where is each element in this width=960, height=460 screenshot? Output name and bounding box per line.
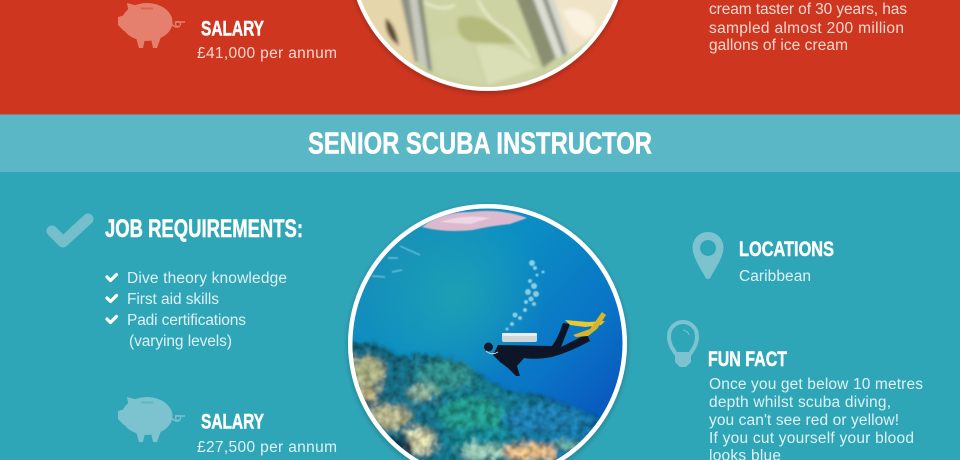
- icon: piggy bank, red section: [118, 3, 185, 48]
- photo: ice cream tubs: [345, 0, 630, 95]
- text: location value: Caribbean: [739, 268, 811, 285]
- text: salary amount, teal section: £27,500 per annum: [197, 439, 337, 456]
- bubbles: [506, 260, 544, 330]
- text: fun fact: [709, 376, 923, 460]
- text: fun fact: depth whilst scuba diving,: [709, 394, 891, 411]
- title: SENIOR SCUBA INSTRUCTOR: [308, 126, 652, 160]
- text: fun fact: If you cut yourself your blood: [709, 430, 914, 447]
- text: salary amount, red section: £41,000 per annum: [197, 45, 337, 62]
- text: fun fact: Once you get below 10 metres: [709, 376, 923, 393]
- text: fun fact, red section: gallons of ice cream: [709, 37, 848, 54]
- reef: [345, 344, 610, 460]
- list: job requirements: (varying levels): [129, 333, 232, 350]
- panel: red ice cream taster section: [0, 0, 960, 114]
- heading: fun fact: FUN FACT: [708, 347, 787, 371]
- list: job requirements: [107, 270, 287, 350]
- banner: title background: [0, 114, 960, 172]
- icon: piggy bank, teal section: [118, 397, 185, 442]
- text: fun fact, red section: cream taster of 30 years, has: [709, 1, 907, 18]
- text: fun fact, red section: sampled almost 200 million: [709, 20, 904, 37]
- list: job requirements: Dive theory knowledge: [127, 270, 287, 287]
- icon: map pin: [692, 232, 724, 279]
- heading: locations: LOCATIONS: [739, 237, 834, 261]
- icon: light bulb: [669, 322, 697, 367]
- heading: salary, red section: SALARY: [201, 18, 264, 40]
- heading: salary, teal section: SALARY: [201, 410, 264, 434]
- text: fun fact: you can't see red or yellow!: [709, 412, 899, 429]
- icon: large check mark: [52, 219, 88, 242]
- diver: [484, 312, 606, 376]
- photo: scuba diver over coral reef: [345, 204, 627, 460]
- heading: job requirements: JOB REQUIREMENTS:: [105, 215, 303, 243]
- surface light: [372, 211, 527, 277]
- list: job requirements: First aid skills: [127, 291, 219, 308]
- text: fun fact, red section: [709, 1, 907, 54]
- list: job requirements: Padi certifications: [127, 312, 246, 329]
- panel: teal scuba instructor section: [0, 114, 960, 460]
